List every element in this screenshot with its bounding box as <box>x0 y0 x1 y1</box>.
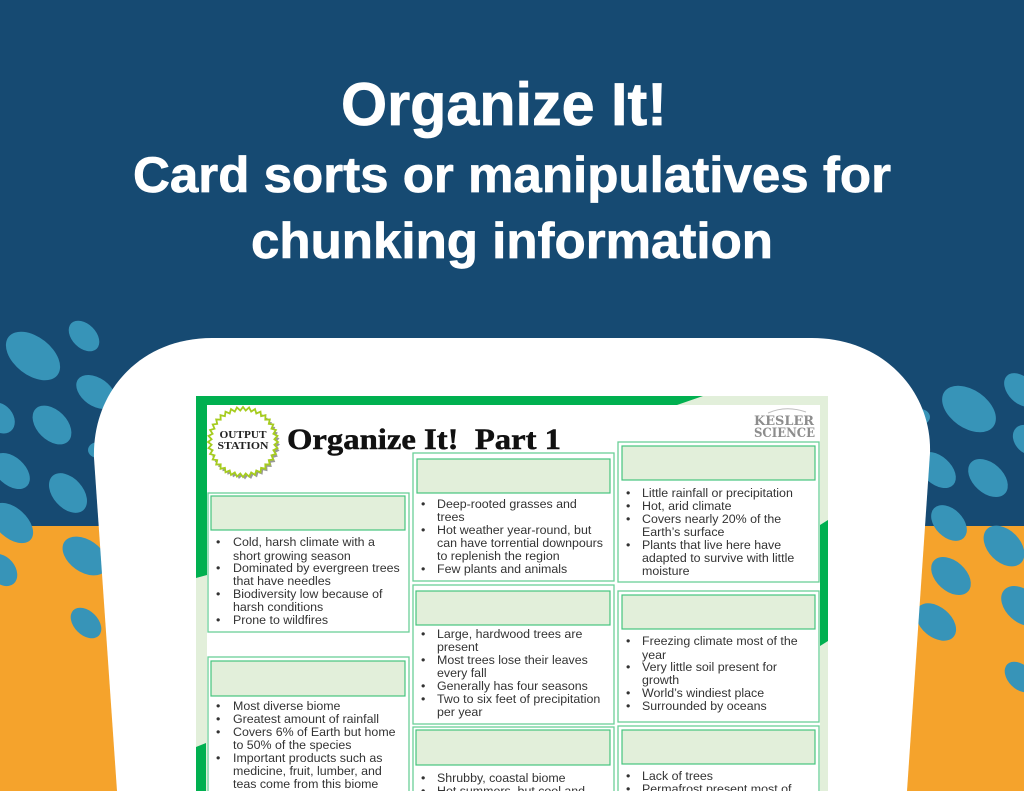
card: right 1: • <box>626 499 630 513</box>
background: orange band <box>0 526 1024 791</box>
card: right 1: • <box>626 486 630 500</box>
card: right 2: • <box>626 660 630 674</box>
card: middle 2: • <box>421 653 425 667</box>
decorative ovals: right cluster <box>909 367 1024 698</box>
card: left 1: Biodiversity low because of <box>233 587 383 601</box>
card: left 2: Important products such as <box>233 751 382 765</box>
card: middle 2: • <box>421 627 425 641</box>
card: right 2 <box>618 591 819 722</box>
card: right 2: Very little soil present for <box>642 660 777 674</box>
card: left 1: • <box>216 587 220 601</box>
card: middle 2: Large, hardwood trees are <box>437 627 582 641</box>
card: left 2: • <box>216 712 220 726</box>
worksheet heading: Organize It! Part 1 <box>287 423 561 456</box>
card: left 2: • <box>216 751 220 765</box>
card: middle 3: • <box>421 771 425 785</box>
icon: Kesler Science logo: KESLER <box>754 414 814 429</box>
card: left 1: Prone to wildfires <box>233 613 328 627</box>
card: middle 3 <box>413 727 614 791</box>
card: right 3: • <box>626 769 630 783</box>
white rounded card <box>94 338 930 791</box>
card: left 2: to 50% of the species <box>233 738 351 752</box>
card: left 1: Cold, harsh climate with a <box>233 535 375 549</box>
card: middle 1: Hot weather year-round, but <box>437 523 592 537</box>
card: right 2: Surrounded by oceans <box>642 699 767 713</box>
card: middle 2: Generally has four seasons <box>437 679 588 693</box>
icon: Kesler Science logo: SCIENCE <box>754 426 815 441</box>
card: middle 2: • <box>421 679 425 693</box>
card: middle 2: every fall <box>437 666 487 680</box>
card: left 1 <box>208 493 409 632</box>
card: left 2: • <box>216 699 220 713</box>
card: middle 1: can have torrential downpours <box>437 536 603 550</box>
card: left 2: Most diverse biome <box>233 699 341 713</box>
card: right 1 <box>618 442 819 582</box>
card: left 2: • <box>216 725 220 739</box>
card: middle 2 <box>413 585 614 724</box>
card: right 3: Lack of trees <box>642 769 713 783</box>
card: left 2: medicine, fruit, lumber, and <box>233 764 382 778</box>
card: middle 1: Few plants and animals <box>437 562 567 576</box>
card: right 2: growth <box>642 673 679 687</box>
card: left 2: Covers 6% of Earth but home <box>233 725 396 739</box>
card: middle 2: Most trees lose their leaves <box>437 653 588 667</box>
card: left 1: • <box>216 613 220 627</box>
card: right 1: Hot, arid climate <box>642 499 732 513</box>
card: right 2: World’s windiest place <box>642 686 764 700</box>
card: left 1: short growing season <box>233 549 351 563</box>
card: right 2: • <box>626 634 630 648</box>
card: right 1: Little rainfall or precipitation <box>642 486 793 500</box>
card: right 2: Freezing climate most of the <box>642 634 798 648</box>
card: right 1: • <box>626 512 630 526</box>
worksheet frame <box>196 396 828 791</box>
card: middle 1: • <box>421 523 425 537</box>
card: middle 2: present <box>437 640 479 654</box>
card: right 1: Earth’s surface <box>642 525 725 539</box>
title: chunking information <box>251 213 773 269</box>
card: middle 1: Deep-rooted grasses and <box>437 497 577 511</box>
title <box>133 71 891 269</box>
card: right 3 <box>618 726 819 791</box>
card: middle 3: Shrubby, coastal biome <box>437 771 566 785</box>
card: right 1: adapted to survive with little <box>642 551 794 565</box>
card: right 1: Plants that live here have <box>642 538 781 552</box>
card: right 1: Covers nearly 20% of the <box>642 512 781 526</box>
card: middle 1: • <box>421 562 425 576</box>
card: left 2 <box>208 657 409 791</box>
card: left 1: Dominated by evergreen trees <box>233 561 400 575</box>
card: left 1: • <box>216 561 220 575</box>
card: right 2: year <box>642 648 666 662</box>
icon: Kesler Science logo <box>754 409 815 441</box>
worksheet <box>196 396 828 791</box>
card: right 1: • <box>626 538 630 552</box>
card: left 1: • <box>216 535 220 549</box>
card: middle 1: trees <box>437 510 465 524</box>
background: navy band <box>0 0 1024 526</box>
card: right 1: moisture <box>642 564 690 578</box>
card: right 2: • <box>626 699 630 713</box>
card: left 1: that have needles <box>233 574 331 588</box>
title: Card sorts or manipulatives for <box>133 147 891 203</box>
icon: output station badge: STATION <box>218 441 269 452</box>
card: middle 2: per year <box>437 705 482 719</box>
card: right 2: • <box>626 686 630 700</box>
card: middle 1: to replenish the region <box>437 549 560 563</box>
card: left 2: Greatest amount of rainfall <box>233 712 379 726</box>
card: middle 2: Two to six feet of precipitation <box>437 692 600 706</box>
decorative ovals: left cluster <box>0 315 122 644</box>
icon: output station badge <box>208 407 280 480</box>
icon: output station badge: OUTPUT <box>220 430 266 441</box>
card: middle 1 <box>413 453 614 581</box>
title: Organize It! <box>341 71 667 138</box>
card: middle 2: • <box>421 692 425 706</box>
card: left 1: harsh conditions <box>233 600 323 614</box>
card: left 2: teas come from this biome <box>233 777 378 791</box>
card: middle 1: • <box>421 497 425 511</box>
